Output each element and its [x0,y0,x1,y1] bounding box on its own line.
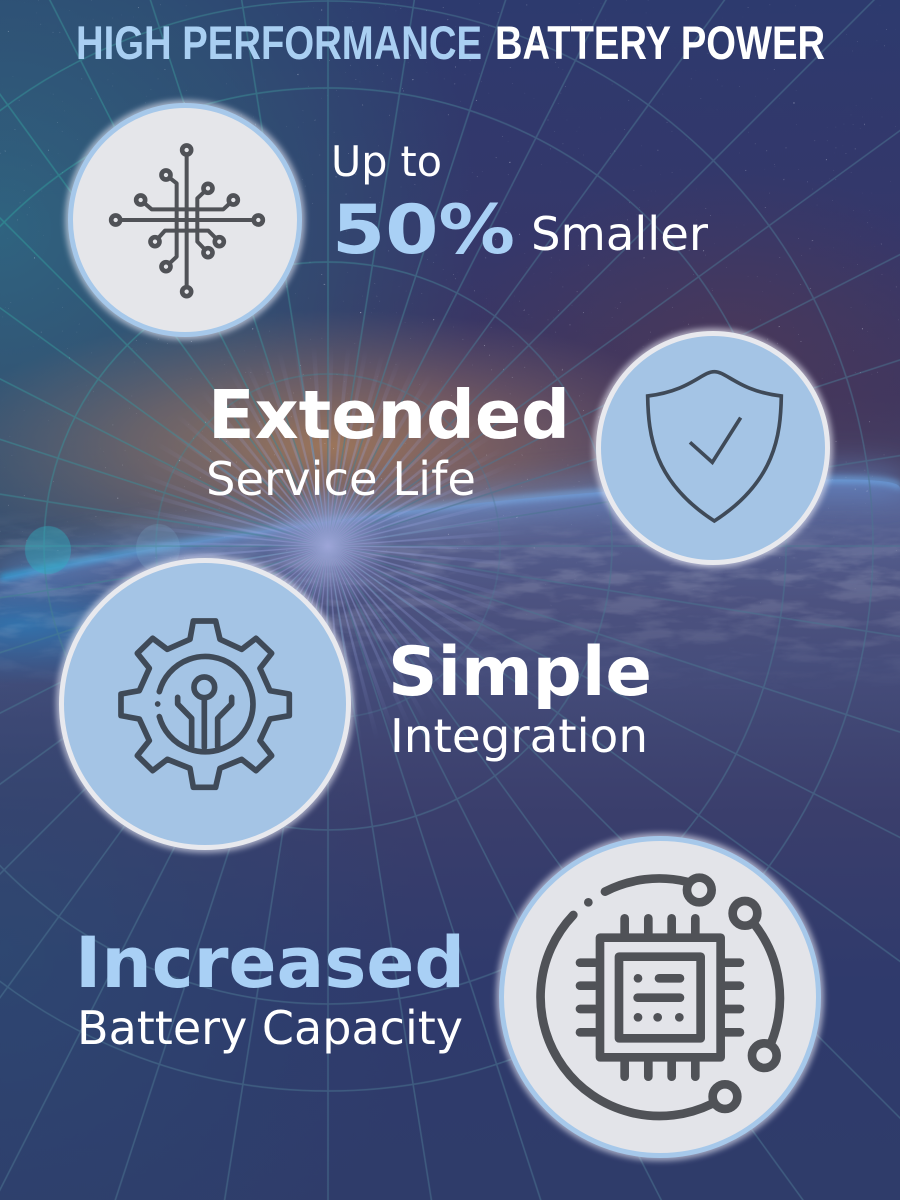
icon: circuit cross [111,145,263,296]
text: up to 50% smaller: 50% [332,191,515,270]
panel: extended service life [206,328,833,568]
panel: simple integration [56,555,652,853]
text: up to 50% smaller: Smaller [531,207,708,261]
text: extended service life [206,376,570,506]
text: extended service life: Service Life [206,452,476,506]
panel: increased battery capacity [75,833,824,1161]
panel: 50% smaller [65,100,708,340]
icon: gear with circuit [121,621,289,787]
text: simple integration: Simple [388,633,652,712]
text: increased battery capacity [75,922,465,1055]
title: HIGH PERFORMANCE [76,16,482,69]
text: increased battery capacity: Battery Capacity [77,1001,463,1055]
title: BATTERY POWER [495,16,825,69]
text: increased battery capacity: Increased [75,922,465,1004]
title [76,16,825,69]
icon: shield with check [648,372,781,521]
text: up to 50% smaller [331,137,708,270]
text: simple integration [388,633,652,763]
text: up to 50% smaller: Up to [331,137,442,186]
icon: microchip [541,878,780,1116]
text: extended service life: Extended [208,376,570,454]
text: simple integration: Integration [390,709,648,763]
